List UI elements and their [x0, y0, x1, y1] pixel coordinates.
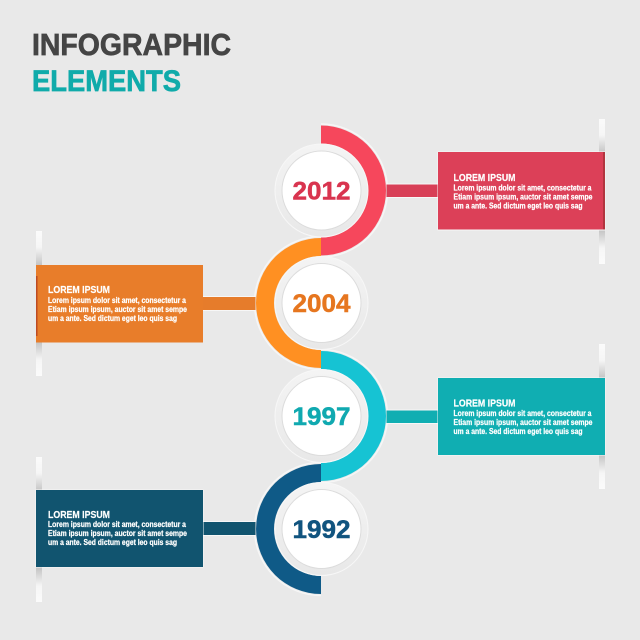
arc: 1997	[321, 350, 388, 482]
year badge: 1997: 1997	[292, 403, 350, 431]
arc: 1992	[255, 462, 321, 596]
year badge: 1992: 1992	[292, 516, 350, 544]
panel: 2012 callout: LOREM IPSUM	[454, 172, 516, 184]
panel: 2012 callout: Etiam ipsum ipsum, auctor sit amet sempe	[454, 191, 593, 201]
panel: 2004 callout: Lorem ipsum dolor sit amet, consectetur a	[48, 295, 186, 305]
panel: 1997 callout: LOREM IPSUM	[454, 398, 516, 410]
panel: 2004 callout	[36, 231, 256, 376]
year badge: 2012: 2012	[292, 178, 350, 206]
panel: 1997 callout: um a ante. Sed dictum eget leo quis sag	[454, 426, 582, 436]
year badge: 1992	[275, 482, 368, 576]
panel: 1997 callout	[386, 344, 606, 489]
year badge: 2004	[275, 256, 368, 350]
panel: 1997 callout: Lorem ipsum dolor sit amet, consectetur a	[454, 408, 592, 418]
panel: 2004 callout: um a ante. Sed dictum eget leo quis sag	[48, 313, 177, 323]
panel: 1997 callout: Etiam ipsum ipsum, auctor sit amet sempe	[454, 417, 593, 427]
arc: 2004	[255, 236, 321, 370]
panel: 1992 callout: Etiam ipsum ipsum, auctor sit amet sempe	[48, 528, 187, 538]
panel: 1992 callout: um a ante. Sed dictum eget leo quis sag	[48, 537, 177, 547]
panel: 1992 callout: LOREM IPSUM	[48, 509, 110, 521]
panel: 2012 callout: Lorem ipsum dolor sit amet, consectetur a	[454, 182, 592, 192]
panel: 2004 callout: Etiam ipsum ipsum, auctor sit amet sempe	[48, 304, 187, 314]
panel: 1992 callout: Lorem ipsum dolor sit amet, consectetur a	[48, 519, 186, 529]
title: ELEMENTS	[32, 65, 181, 98]
panel: 1992 callout	[36, 457, 256, 602]
title: INFOGRAPHIC	[32, 28, 231, 62]
year badge: 1997	[275, 370, 368, 462]
title	[32, 28, 231, 98]
panel: 2004 callout: LOREM IPSUM	[48, 284, 110, 296]
year badge: 2004: 2004	[292, 290, 351, 318]
year badge: 2012	[275, 144, 368, 237]
panel: 2012 callout: um a ante. Sed dictum eget leo quis sag	[454, 200, 582, 210]
arc: 2012	[321, 124, 388, 257]
panel: 2012 callout	[386, 119, 606, 264]
